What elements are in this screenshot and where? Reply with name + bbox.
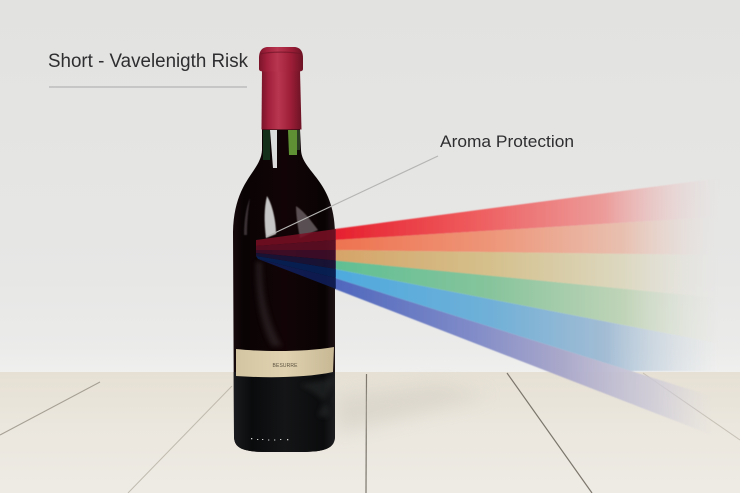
paper label	[236, 347, 334, 377]
wooden table floor	[0, 372, 740, 493]
glass reflections	[270, 130, 277, 168]
label text: BESURRE	[272, 363, 298, 369]
beam: blue	[335, 278, 717, 437]
base dots	[251, 438, 288, 440]
callout label: Aroma Protection	[440, 132, 574, 151]
beam: green	[335, 260, 717, 343]
foil capsule	[262, 70, 302, 130]
beam: light blue	[335, 268, 696, 372]
beam: yellow	[335, 250, 717, 298]
beam: orange	[335, 217, 717, 255]
bottle body	[233, 129, 335, 452]
foil lip	[259, 47, 303, 72]
wine bottle	[230, 47, 340, 455]
beam: red	[335, 178, 720, 240]
title: Short - Vavelenigth Risk	[48, 51, 248, 72]
beams passing through bottle	[256, 229, 336, 289]
background wall	[0, 0, 740, 374]
title underline	[49, 86, 247, 88]
lower dark section	[230, 130, 340, 455]
spectrum beams	[334, 183, 697, 424]
callout leader line	[266, 156, 438, 237]
